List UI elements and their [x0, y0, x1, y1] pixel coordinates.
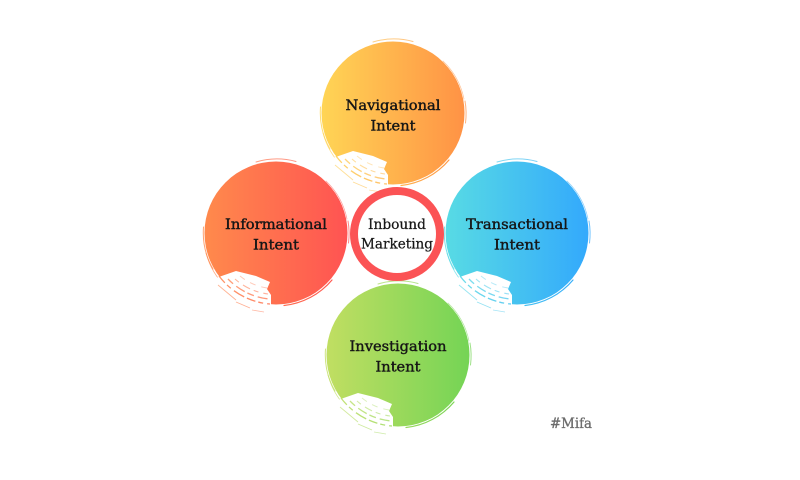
label: Informational Intent: Informational [225, 217, 327, 233]
panel: Transactional Intent brush circle [444, 159, 590, 312]
label: Investigation Intent: Intent [376, 360, 421, 376]
label: Transactional Intent: Transactional [466, 217, 568, 233]
label: Investigation Intent: Investigation [350, 339, 447, 355]
panel: Investigation Intent brush circle [325, 281, 471, 434]
label: Inbound Marketing: Inbound [368, 217, 426, 233]
label: Navigational Intent: Intent [370, 118, 416, 134]
label: Navigational Intent: Navigational [346, 98, 440, 114]
label: Transactional Intent: Intent [494, 238, 541, 254]
label: Informational Intent: Intent [253, 238, 300, 254]
watermark: #Mifa: #Mifa [550, 416, 592, 432]
label: Inbound Marketing: Marketing [361, 236, 433, 252]
panel: Informational Intent brush circle [203, 159, 349, 312]
panel: center ring Inbound Marketing [354, 191, 440, 277]
panel: Navigational Intent brush circle [320, 39, 466, 192]
